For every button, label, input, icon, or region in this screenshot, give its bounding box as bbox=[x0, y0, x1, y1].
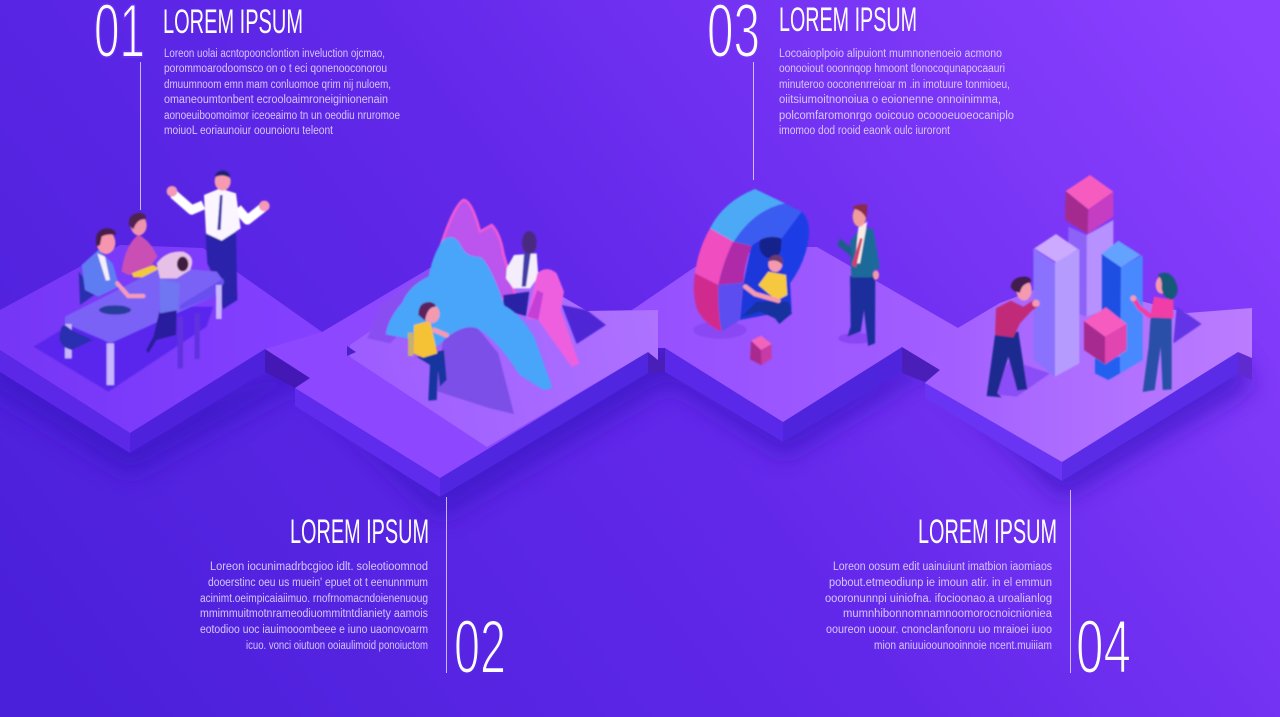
woman arm bbox=[1133, 298, 1150, 316]
left chair base bbox=[59, 325, 93, 350]
number 02: 02 bbox=[454, 605, 506, 690]
table top bbox=[65, 267, 224, 343]
left seated man bbox=[82, 228, 119, 297]
body 02: acinimt.oeimpicaiaiimuo. rnofrnomacndoienenuoug bbox=[200, 593, 428, 605]
donut shadow bbox=[693, 321, 747, 339]
body 01: Loreon uolai acntopoonclontion inveluction ojcmao, bbox=[164, 48, 385, 60]
body 02: icuo. vonci oiutuon ooiaulimoid ponoiuctom bbox=[246, 640, 428, 652]
standing man head bbox=[215, 172, 231, 191]
seated man jacket bbox=[82, 250, 119, 297]
woman at back bbox=[122, 213, 162, 277]
seated man shirt bbox=[97, 253, 110, 281]
front person legs bbox=[146, 310, 177, 353]
donut inner hole bbox=[740, 238, 792, 320]
platform 3 block bbox=[610, 247, 1000, 442]
heading 04: LOREM IPSUM bbox=[918, 513, 1057, 551]
platform 1 block bbox=[0, 245, 340, 453]
small cube bbox=[750, 336, 772, 365]
connector lines bbox=[140, 62, 1070, 673]
body 01: moiuoL eoriaunoiur oounoioru teleont bbox=[164, 125, 334, 137]
front seated person bbox=[146, 251, 192, 353]
front person shawl bbox=[157, 251, 192, 278]
man arm bbox=[1015, 304, 1035, 317]
platform 2 arrow block bbox=[265, 260, 665, 497]
man legs bbox=[987, 332, 1027, 397]
standing man shirt bbox=[204, 188, 241, 241]
body 02: mmimmuitmotnrameodiuommitntdianiety aamois bbox=[200, 608, 428, 620]
donut light blue rim bbox=[710, 189, 785, 243]
pink mountain inner shade bbox=[527, 290, 543, 320]
platform 3 front faces bbox=[665, 348, 783, 442]
body 04: Loreon oosum edit uainuiunt imatbion iaomiaos bbox=[833, 561, 1052, 573]
body 04: mumnhibonnomnamnoomorocnoicnioniea bbox=[843, 608, 1053, 620]
body 02: dooerstinc oeu us muein' epuet ot t eenunnmum bbox=[208, 577, 428, 589]
platform 2 surface bbox=[265, 260, 658, 478]
platform 4 arrow notch bbox=[1238, 352, 1252, 380]
body 03: oiitsiumoitnonoiua o eoionenne onnoinimma, bbox=[779, 94, 1001, 106]
seated person legs bbox=[742, 302, 792, 324]
platform 4 surface bbox=[925, 280, 1252, 462]
body 03: minuteroo ooconenrreioar m .in imotuure tonmioeu, bbox=[779, 79, 1010, 91]
woman top bbox=[1150, 297, 1173, 318]
platform 2 lighter arrow bbox=[350, 260, 658, 447]
seated person bbox=[742, 255, 792, 324]
suit man left arm bbox=[837, 238, 853, 258]
platform 1 front faces bbox=[0, 350, 130, 453]
left lavender bar bbox=[1033, 234, 1079, 377]
body 02: eotodioo uoc iauimooombeee e iuno uaonovoarm bbox=[200, 624, 428, 636]
body 03: oonooiout ooonnqop hmoont tlonocoqunapocaauri bbox=[779, 63, 1005, 75]
platform 1 surface bbox=[0, 245, 340, 433]
step 02 text block bbox=[200, 513, 506, 690]
scene 4: bar chart bbox=[987, 175, 1202, 397]
child legs bbox=[417, 350, 447, 401]
man shadow bbox=[987, 360, 1050, 397]
woman with pink top bbox=[1130, 273, 1178, 392]
body 01: omaneoumtonbent ecrooloaimroneiginionenain bbox=[164, 94, 388, 106]
woman pants bbox=[1143, 314, 1172, 392]
body 02: Loreon iocunimadrbcgioo idlt. soleotioomnod bbox=[210, 561, 428, 573]
suit man shadow bbox=[838, 333, 875, 344]
front person torso bbox=[159, 278, 180, 313]
suit man jacket bbox=[850, 227, 880, 277]
platform 4 arrow block bbox=[925, 280, 1252, 481]
table front legs bbox=[65, 324, 72, 358]
body 04: mion aniuuioounooinnoie ncent.muiiiam bbox=[874, 640, 1052, 652]
seated man head bbox=[97, 231, 115, 254]
back person hair bbox=[522, 231, 537, 254]
back person legs bbox=[503, 292, 529, 316]
man sweater bbox=[995, 301, 1032, 337]
body 01 bbox=[164, 48, 400, 137]
donut dark blue face bbox=[780, 212, 809, 283]
platform 3 surface bbox=[610, 247, 1000, 422]
seated man arm bbox=[117, 283, 143, 296]
suit man trousers bbox=[847, 275, 875, 346]
platform 1 notch bbox=[265, 349, 310, 388]
standing man tie bbox=[217, 195, 223, 230]
platform 2 small notch mark bbox=[347, 346, 356, 356]
donut blue face bbox=[733, 203, 802, 246]
body 03: imomoo dod rooid eaonk oulc iuroront bbox=[779, 125, 951, 137]
platform 2 front faces bbox=[295, 388, 440, 497]
yellow paper bbox=[132, 265, 162, 277]
body 03 bbox=[779, 48, 1014, 137]
platform 2 arrow notch bbox=[648, 348, 665, 373]
man head bbox=[1016, 279, 1032, 301]
faint back shadow bbox=[367, 268, 443, 343]
table shadow bbox=[33, 307, 213, 392]
body 04: ooureon uoour. cnonclanfonoru uo mraioei iuoo bbox=[826, 624, 1052, 636]
heading 02: LOREM IPSUM bbox=[290, 513, 429, 551]
platform 3 notch bbox=[902, 347, 940, 382]
back person shirt bbox=[506, 253, 538, 288]
platform 4 front faces bbox=[925, 383, 1062, 481]
heading 01: LOREM IPSUM bbox=[163, 3, 303, 41]
body 01: dmuumnoom emn mam conluomoe qrim nij nuloem, bbox=[164, 79, 391, 91]
child climbing bbox=[408, 302, 447, 401]
step 01 text block bbox=[94, 0, 400, 137]
scene 1: meeting at table bbox=[33, 171, 270, 392]
platform shadows bbox=[0, 330, 1255, 520]
back shadow bbox=[1173, 307, 1202, 343]
child head bbox=[424, 305, 440, 323]
seated person arms bbox=[745, 287, 778, 301]
donut crimson rim bbox=[694, 273, 722, 332]
suit man tie bbox=[852, 238, 863, 267]
body 02 bbox=[200, 561, 428, 652]
woman head bbox=[1156, 276, 1168, 294]
donut chart bbox=[694, 189, 809, 332]
number 04: 04 bbox=[1076, 605, 1131, 690]
blue mountain bbox=[387, 238, 551, 389]
step 04 text block bbox=[825, 513, 1131, 690]
child backpack bbox=[408, 333, 413, 356]
right dark shadow bbox=[562, 305, 606, 344]
body 04 bbox=[825, 561, 1053, 652]
suit man head bbox=[853, 207, 866, 227]
back person bbox=[503, 231, 538, 316]
body 04: oooronunnpi uiniofna. ifocioonao.a uroalianlog bbox=[825, 593, 1052, 605]
child arm bbox=[434, 330, 447, 335]
pink mountain bbox=[437, 200, 516, 303]
suit man hand bbox=[873, 270, 879, 280]
woman hair bbox=[1157, 273, 1178, 300]
seated person head bbox=[768, 256, 782, 272]
front person hair bbox=[177, 257, 188, 271]
back person tie bbox=[522, 253, 531, 287]
dark tablet bbox=[99, 305, 131, 315]
standing suit man bbox=[837, 204, 880, 346]
front pink cube bbox=[1084, 307, 1127, 364]
body 03: Locoaioplpoio alipuiont mumnonenoeio acmono bbox=[779, 48, 1002, 60]
body 01: porommoarodoomsco on o t eci qonenooconorou bbox=[164, 63, 387, 75]
standing man bbox=[167, 171, 270, 309]
donut pink rim bbox=[695, 228, 733, 285]
suit man shirt bbox=[855, 222, 867, 263]
standing man hands bbox=[167, 186, 177, 197]
woman head bbox=[131, 215, 147, 235]
body 03: polcomfaromonrgo ooicouo ocoooeuoeocaniplo bbox=[779, 110, 1014, 122]
standing man legs bbox=[206, 230, 237, 309]
seated person shirt bbox=[758, 272, 787, 301]
step 03 text block bbox=[707, 0, 1014, 137]
blue bar bbox=[1095, 241, 1143, 380]
body 04: pobout.etmeodiunp ie imoun atir. in el emmun bbox=[829, 577, 1052, 589]
child shirt bbox=[413, 321, 437, 358]
blue mountain shadow bbox=[433, 323, 514, 414]
scene 2: mountain chart bbox=[367, 200, 606, 414]
standing man arms bbox=[173, 194, 263, 220]
table bbox=[59, 267, 224, 385]
body 01: aonoeuiboomoimor iceoeaimo tn un oeodiu nruromoe bbox=[164, 110, 400, 122]
top pink cube bbox=[1065, 175, 1113, 234]
tall back bar bbox=[1068, 220, 1113, 317]
table back legs bbox=[178, 317, 183, 368]
table edge bbox=[180, 278, 224, 310]
chair bbox=[79, 272, 97, 305]
donut magenta face bbox=[718, 242, 752, 285]
scene 3: donut chart bbox=[693, 189, 880, 365]
donut lower blue face bbox=[718, 283, 743, 332]
heading 03: LOREM IPSUM bbox=[779, 1, 917, 39]
woman jacket bbox=[122, 235, 157, 275]
man with red sweater bbox=[987, 277, 1050, 397]
pink right mountain bbox=[527, 269, 579, 367]
